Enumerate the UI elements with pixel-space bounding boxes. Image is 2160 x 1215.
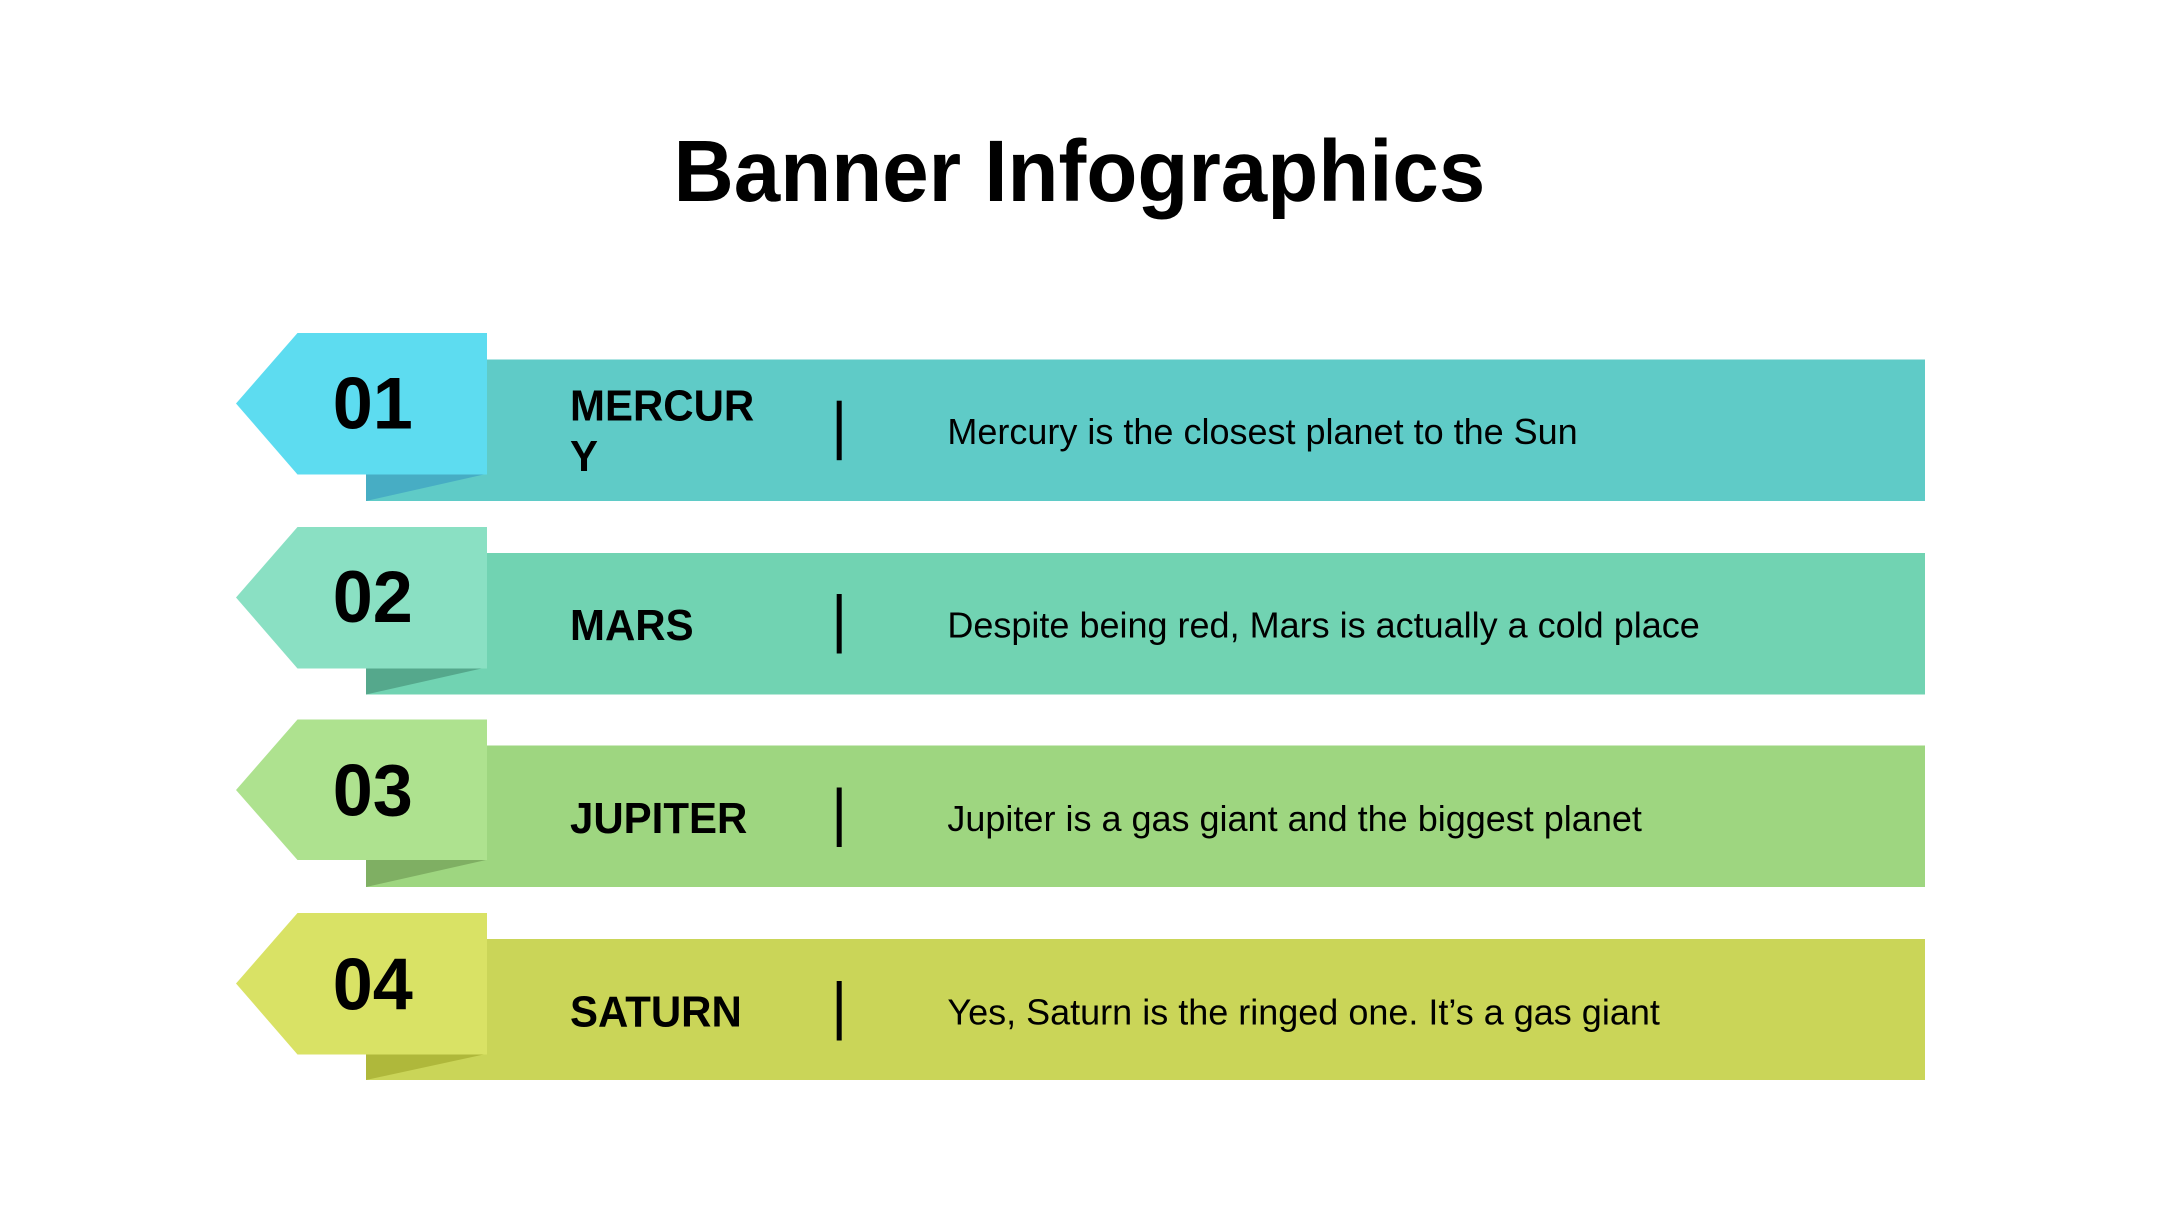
name Jupiter: JUPITER	[570, 794, 747, 843]
name Mercury: Y	[570, 432, 598, 481]
number 03: 03	[333, 750, 413, 832]
description 04: Yes, Saturn is the ringed one. It’s a gas giant	[947, 992, 1660, 1032]
banner 01: Mercury	[236, 333, 1925, 501]
description 03: Jupiter is a gas giant and the biggest planet	[947, 798, 1642, 839]
arrow tag 02	[236, 527, 487, 668]
ribbon 02	[366, 553, 1925, 694]
banner 02: Mars	[236, 527, 1925, 694]
arrow tag 04	[236, 913, 487, 1054]
name Mars: MARS	[570, 601, 694, 650]
divider 01	[837, 401, 842, 460]
ribbon 03	[366, 746, 1925, 887]
title: Banner Infographics	[674, 124, 1485, 220]
number 04: 04	[333, 944, 413, 1026]
number 01: 01	[333, 363, 413, 445]
ribbon 04	[366, 939, 1925, 1080]
ribbon 01	[366, 360, 1925, 501]
divider 02	[837, 594, 842, 654]
name Saturn: SATURN	[570, 988, 742, 1037]
banner 04: Saturn	[236, 913, 1925, 1080]
ribbon fold 01	[366, 474, 486, 501]
arrow tag 03	[236, 720, 487, 860]
number 02: 02	[333, 556, 413, 638]
ribbon fold 04	[366, 1054, 486, 1080]
ribbon fold 03	[366, 860, 486, 887]
description 01: Mercury is the closest planet to the Sun	[947, 411, 1578, 452]
ribbon fold 02	[366, 668, 486, 694]
banner 03: Jupiter	[236, 720, 1925, 887]
name Mercury: MERCUR	[570, 382, 754, 431]
divider 04	[837, 981, 842, 1040]
arrow tag 01	[236, 333, 487, 474]
description 02: Despite being red, Mars is actually a cold place	[947, 604, 1700, 646]
divider 03	[837, 788, 842, 847]
